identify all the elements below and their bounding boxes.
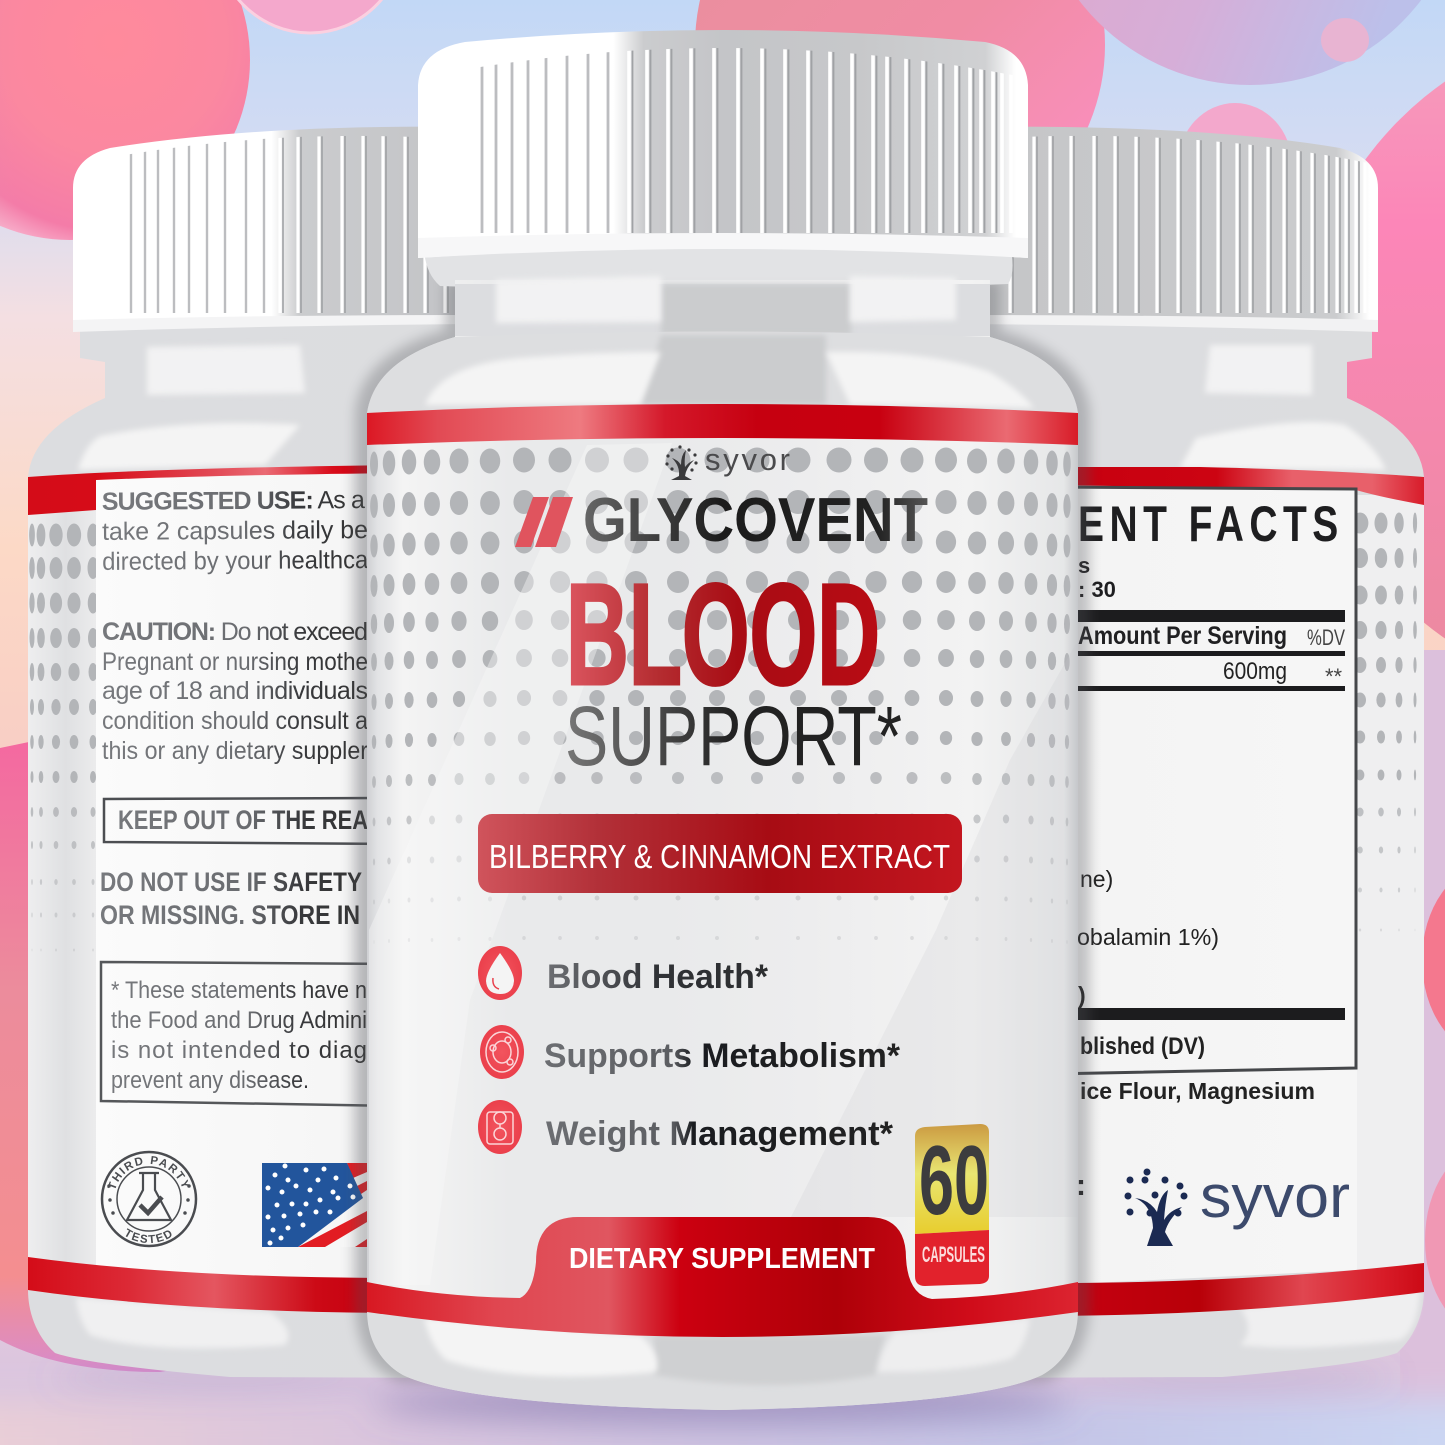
left bottle base highlight bbox=[76, 1297, 288, 1348]
dose row: ** bbox=[1325, 664, 1343, 689]
left bottle cap bbox=[73, 127, 470, 332]
right bottle dot strip bbox=[1356, 495, 1424, 1270]
serving info: s bbox=[1078, 553, 1090, 578]
right bottle base highlight bbox=[1240, 1290, 1420, 1348]
bottom red band with tab bbox=[367, 1217, 1078, 1337]
benefit: blood health: Blood Health* bbox=[547, 958, 769, 996]
left back bottle bbox=[28, 126, 455, 1378]
amount per serving row: %DV bbox=[1307, 625, 1345, 650]
syvor brand logo bbox=[1128, 1163, 1350, 1246]
label sheen bbox=[369, 443, 1078, 1285]
top red band bbox=[367, 404, 1078, 445]
badge bottom text: TESTED bbox=[126, 1228, 172, 1243]
shoulder shading and highlights bbox=[367, 332, 1078, 413]
supplement facts box bbox=[1050, 487, 1356, 1074]
left bottle panel bbox=[96, 473, 400, 1280]
neck shading and highlights bbox=[455, 276, 990, 336]
amount per serving row: Amount Per Serving bbox=[1078, 622, 1287, 650]
front bottle cap bbox=[418, 30, 1028, 258]
ground shadows bbox=[50, 1370, 1395, 1424]
colon fragment: : bbox=[1076, 1169, 1086, 1202]
ingredient fragments bbox=[1077, 866, 1219, 1008]
flask icon bbox=[127, 1173, 171, 1220]
icon: metabolism cycle bbox=[480, 1025, 524, 1079]
caution text: Pregnant or nursing mothe bbox=[102, 648, 368, 676]
american flag bbox=[262, 1163, 367, 1247]
disclaimer box: * These statements have n bbox=[111, 977, 367, 1004]
suggested use text bbox=[102, 486, 368, 576]
ingredient fragments: ) bbox=[1078, 982, 1086, 1008]
dietary supplement label: DIETARY SUPPLEMENT bbox=[569, 1243, 875, 1275]
right bottle panel bbox=[1050, 487, 1357, 1285]
disclaimer box: is not intended to diag bbox=[111, 1037, 367, 1064]
disclaimer box bbox=[101, 962, 400, 1106]
left bottle dot strip bbox=[28, 505, 97, 1270]
suggested use text: take 2 capsules daily be bbox=[102, 516, 368, 546]
safety warning bbox=[100, 867, 362, 930]
keep out of reach box: KEEP OUT OF THE REA bbox=[118, 805, 368, 835]
extract pill bbox=[478, 814, 962, 893]
dose row: 600mg bbox=[1223, 658, 1287, 685]
benefit: weight management: Weight Management* bbox=[546, 1115, 894, 1153]
serving info: : 30 bbox=[1078, 577, 1116, 602]
disclaimer box: prevent any disease. bbox=[111, 1067, 309, 1094]
keep out of reach box bbox=[104, 798, 400, 844]
shadow cast by front bottle bbox=[355, 280, 1090, 1382]
right bottle neck highlight bbox=[1205, 345, 1312, 395]
front label dots bbox=[374, 460, 1067, 942]
small wordmark: syvor bbox=[705, 442, 790, 477]
60 capsules badge: 60 bbox=[919, 1125, 989, 1235]
disclaimer box: the Food and Drug Admini bbox=[111, 1007, 367, 1034]
supplement facts heading: ENT FACTS bbox=[1078, 495, 1344, 552]
benefit: blood health bbox=[478, 946, 769, 1000]
table rule bbox=[1050, 686, 1345, 691]
left bottle bottom band bbox=[28, 1257, 400, 1313]
left bottle neck highlight bbox=[147, 345, 305, 395]
icon: blood drop bbox=[478, 946, 522, 1000]
daily value note: blished (DV) bbox=[1080, 1033, 1205, 1060]
caution text: condition should consult a bbox=[102, 707, 368, 735]
60 capsules badge bbox=[915, 1124, 989, 1286]
front bottle neck ring bbox=[424, 245, 1013, 291]
right bottle body bbox=[960, 318, 1424, 1378]
tree icon bbox=[1128, 1172, 1184, 1246]
benefit: metabolism: Supports Metabolism* bbox=[544, 1037, 901, 1075]
dose row bbox=[1223, 658, 1343, 689]
left bottle body bbox=[28, 318, 490, 1378]
right bottle top band bbox=[1050, 467, 1424, 505]
small tree icon bbox=[667, 447, 696, 480]
support heading: SUPPORT* bbox=[565, 689, 902, 783]
cap ribs bbox=[482, 30, 1011, 233]
badge side dots bbox=[109, 1186, 189, 1213]
safety warning: OR MISSING. STORE IN bbox=[100, 900, 360, 930]
benefit: metabolism bbox=[480, 1025, 901, 1079]
right back bottle bbox=[960, 127, 1424, 1378]
right bottle cap bbox=[960, 127, 1378, 332]
third party tested badge bbox=[100, 1150, 198, 1248]
table rule bbox=[1050, 651, 1345, 656]
table rule bbox=[1050, 1008, 1345, 1020]
caution text: age of 18 and individuals bbox=[102, 677, 368, 705]
caution text bbox=[102, 618, 368, 765]
badge top text: THIRD PARTY bbox=[107, 1156, 189, 1188]
left bottle top band bbox=[28, 465, 400, 515]
glycovent logo bbox=[515, 486, 928, 555]
extract pill: BILBERRY & CINNAMON EXTRACT bbox=[489, 838, 950, 875]
safety warning: DO NOT USE IF SAFETY bbox=[100, 867, 362, 897]
suggested use text: directed by your healthca bbox=[102, 546, 368, 576]
base shading and highlights bbox=[367, 1310, 1078, 1410]
icon: weight scale bbox=[478, 1100, 522, 1154]
ingredient fragments: obalamin 1%) bbox=[1077, 924, 1219, 950]
right bottle bottom band bbox=[1050, 1263, 1424, 1316]
brand name: GLYCOVENT bbox=[583, 486, 928, 555]
serving info bbox=[1078, 553, 1116, 602]
table rule bbox=[1050, 610, 1345, 622]
caution text: CAUTION: Do not exceed bbox=[102, 618, 368, 646]
blood heading: BLOOD bbox=[566, 554, 880, 715]
ingredient fragments: ne) bbox=[1080, 866, 1113, 892]
syvor logo bbox=[667, 442, 790, 480]
front bottle body bbox=[367, 280, 1078, 1410]
other ingredients: ice Flour, Magnesium bbox=[1080, 1078, 1315, 1104]
suggested use text: SUGGESTED USE: As a bbox=[102, 486, 365, 516]
cap skirt bbox=[418, 233, 1028, 258]
caution text: this or any dietary suppler bbox=[102, 737, 368, 765]
left bottle shoulder highlight bbox=[78, 423, 300, 470]
right bottle shoulder highlight bbox=[1180, 422, 1386, 470]
front bottle bbox=[367, 30, 1078, 1410]
60 capsules badge: CAPSULES bbox=[922, 1242, 985, 1267]
benefit: weight management bbox=[478, 1100, 894, 1154]
logo slashes bbox=[515, 497, 573, 547]
wordmark: syvor bbox=[1200, 1163, 1350, 1230]
